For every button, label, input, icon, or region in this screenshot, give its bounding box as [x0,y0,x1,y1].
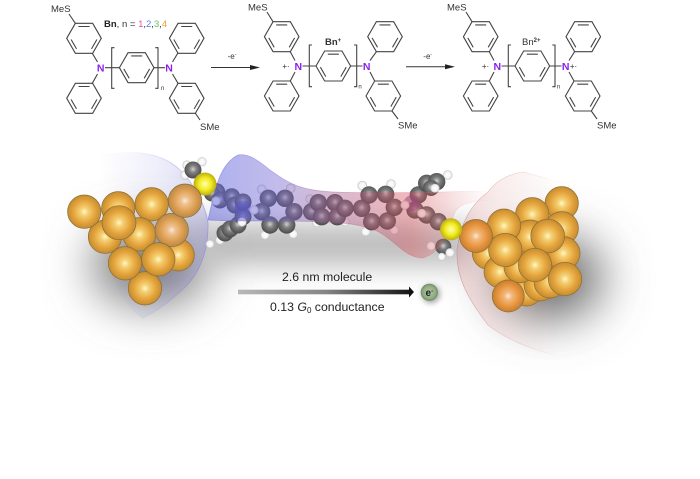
chemical structure: Bn radical cation: +· [282,62,290,71]
arrow: second oxidation: -e [423,52,430,61]
atoms: nitrogen [234,195,420,218]
atoms: carbon [184,162,451,255]
caption: conductance: 0.13 G [270,300,307,314]
sulfur atom: left anchor [194,172,216,196]
chemical structure: Bn neutral: SMe [200,122,220,133]
chemical structure: Bn dication: n [557,84,560,90]
arrow: first oxidation [211,52,260,70]
chemical structure: Bn radical cation: N [295,61,302,73]
chemical structure: Bn dication: MeS [447,2,467,14]
atoms: hydrogen front layer [194,184,455,261]
chemical structure: Bn dication: N [562,61,569,73]
isosurface: right electrode lobe [457,172,600,356]
arrow: first oxidation: -e [228,52,235,61]
arrow: second oxidation [406,52,455,69]
compound label: Bn, n = 1,2,3,4 [104,19,167,30]
isosurface: left electrode lobe [97,152,208,318]
compound label: Bn [325,37,338,48]
caption: conductance: conductance [311,300,385,314]
chemical structure: Bn neutral: N [165,62,173,74]
chemical structure: Bn neutral [51,4,220,133]
chemical structure: Bn radical cation: SMe [398,120,418,132]
chemical structure: Bn neutral: MeS [51,4,71,15]
chemical structure: Bn dication: N [494,61,501,73]
electron [421,284,440,303]
chemical structure: Bn neutral: N [97,62,104,74]
sulfur atom: right anchor [440,218,462,240]
gold electrode: left cluster [68,184,202,305]
chemical structure: Bn radical cation: N [363,61,370,73]
arrow: electron transport [238,286,414,298]
electron: - [431,289,433,295]
atoms: hydrogen back layer [180,157,453,251]
chemical structure: Bn dication: +· [570,62,577,71]
compound label: 2+ [534,38,541,44]
chemical structure: Bn radical cation: n [358,84,362,90]
chemical structure: Bn dication: SMe [597,120,617,132]
isosurface: bridge orbital [208,155,490,258]
soft shadows under junction [92,225,603,320]
chemical structure: Bn radical cation: MeS [248,2,268,14]
caption: molecule length: 2.6 nm molecule [282,270,372,284]
electron: e [426,288,431,299]
arrow: second oxidation: - [430,52,432,58]
chemical structure: Bn dication: +· [482,62,489,71]
chemical structure: Bn radical cation [248,2,418,132]
molecule: backbone atoms [180,157,455,261]
compound label: + [338,38,342,44]
compound label: Bn [522,37,534,48]
arrow: first oxidation: - [235,52,237,58]
chemical structure: Bn neutral: n [161,86,164,92]
chemical structure: Bn dication [447,2,617,132]
caption: conductance: 0 [307,306,312,315]
gold electrode: right cluster [460,187,582,312]
